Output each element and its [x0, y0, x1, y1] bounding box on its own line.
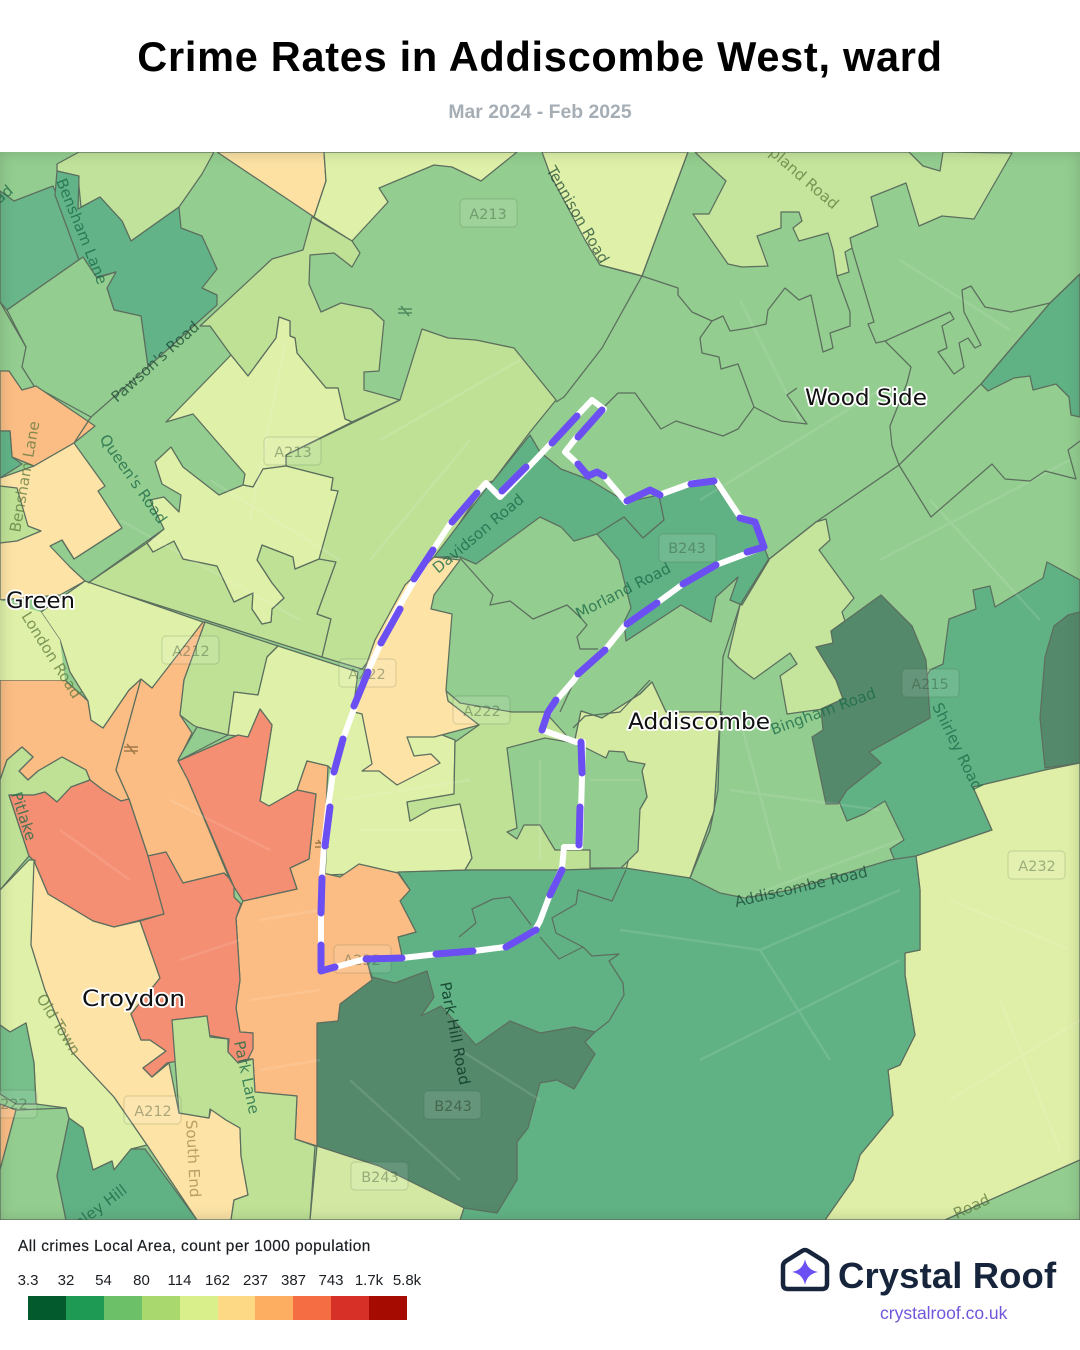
road name labels: Bingham Road	[768, 684, 878, 739]
road number shields: A232	[343, 953, 381, 969]
legend title: All crimes Local Area, count per 1000 population	[18, 1238, 371, 1255]
place name labels: Croydon	[82, 987, 185, 1012]
road name labels: Park Hill Road	[436, 980, 474, 1087]
legend value labels: 387	[281, 1272, 306, 1289]
road name labels: Tennison Road	[542, 162, 613, 267]
legend value labels: 162	[205, 1272, 230, 1289]
website link: crystalroof.co.uk	[880, 1303, 1007, 1323]
legend value labels: 743	[318, 1272, 344, 1289]
road name labels: Addiscombe Road	[733, 863, 869, 911]
road name labels: Park Lane	[230, 1039, 263, 1116]
road name labels: Pitlake	[7, 790, 40, 843]
legend value labels: 54	[95, 1272, 112, 1289]
road number shields: B243	[434, 1099, 472, 1115]
road name labels: Old Town	[33, 991, 84, 1058]
road number shields: A213	[274, 445, 312, 461]
road number shields: B243	[361, 1170, 399, 1186]
road name labels	[0, 136, 993, 1250]
road name labels: London Road	[18, 609, 85, 702]
road number shields	[0, 199, 1065, 1190]
panel: choropleth map	[0, 152, 1080, 1220]
ward boundary lines	[0, 152, 1080, 1032]
legend value labels	[18, 1272, 422, 1289]
road name labels: Pawson's Road	[108, 318, 203, 406]
road name labels: Morland Road	[573, 559, 674, 623]
road name labels: Shirley Road	[928, 700, 986, 793]
ward regions	[0, 152, 1080, 1220]
street texture	[60, 260, 1080, 1180]
road number shields: A213	[469, 207, 507, 223]
legend value labels: 5.8k	[393, 1272, 422, 1289]
legend swatches	[28, 1296, 407, 1320]
road name labels: Bensham Lane	[6, 420, 43, 534]
logo wordmark: Crystal Roof	[838, 1255, 1056, 1296]
road name labels: South End	[182, 1119, 204, 1198]
legend value labels: 32	[58, 1272, 74, 1289]
road number shields: B243	[668, 541, 706, 557]
ward boundary: Addiscombe West	[321, 400, 764, 971]
legend value labels: 237	[243, 1272, 268, 1289]
road name labels: Davidson Road	[429, 490, 528, 577]
railway station icons	[124, 306, 412, 850]
map edge shading	[0, 152, 1080, 1220]
legend value labels: 114	[168, 1272, 191, 1289]
road name labels: Bensham Lane	[52, 176, 111, 287]
logo: Crystal Roof house icon	[780, 1248, 830, 1292]
road number shields: A222	[348, 667, 386, 683]
legend value labels: 3.3	[18, 1272, 38, 1289]
legend: colour scale	[18, 1272, 422, 1320]
road number shields: A212	[134, 1104, 172, 1120]
road number shields: A222	[463, 704, 501, 720]
road name labels: Queen's Road	[96, 431, 171, 527]
road number shields: A215	[911, 677, 949, 693]
legend value labels: 1.7k	[355, 1272, 384, 1289]
legend value labels: 80	[133, 1272, 150, 1289]
title: Crime Rates in Addiscombe West, ward	[137, 33, 943, 80]
place name labels: Green	[6, 589, 75, 614]
road number shields: A212	[172, 644, 210, 660]
place name labels: Wood Side	[805, 386, 927, 411]
place name labels: Addiscombe	[628, 710, 770, 735]
place name labels	[6, 386, 927, 1012]
road number shields: A232	[1018, 859, 1056, 875]
subtitle: date range: Mar 2024 - Feb 2025	[448, 101, 632, 123]
